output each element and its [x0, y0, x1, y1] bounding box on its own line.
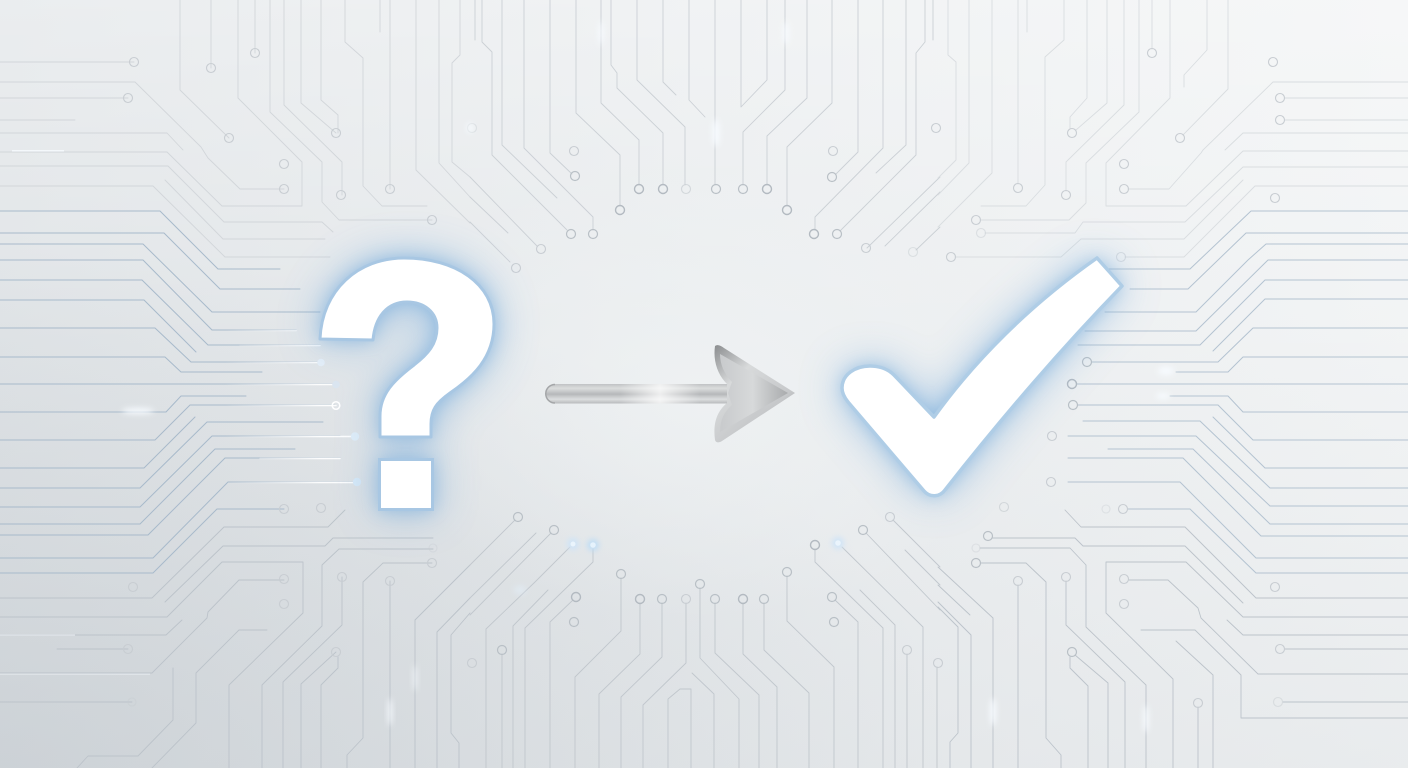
circuit traces: top centre	[470, 0, 940, 262]
circuit traces: right middle	[1068, 211, 1408, 573]
circuit traces: bottom centre	[470, 520, 940, 768]
circuit traces: top right	[938, 0, 1408, 257]
icon: metallic arrow	[546, 345, 795, 442]
icon: check mark	[842, 258, 1122, 496]
circuit traces: top left	[0, 0, 470, 257]
circuit traces: left middle	[0, 211, 356, 573]
circuit traces: bottom right	[938, 510, 1408, 768]
glowing light spots on traces	[0, 21, 1174, 733]
glowing terminal dots, bottom centre	[567, 537, 844, 551]
glowing terminal dots, left of question mark	[317, 359, 361, 486]
circuit node rings	[124, 48, 1284, 708]
white highlighted traces near question mark	[226, 330, 357, 482]
icon: question mark	[320, 258, 494, 510]
circuit traces: bottom left	[0, 510, 470, 768]
